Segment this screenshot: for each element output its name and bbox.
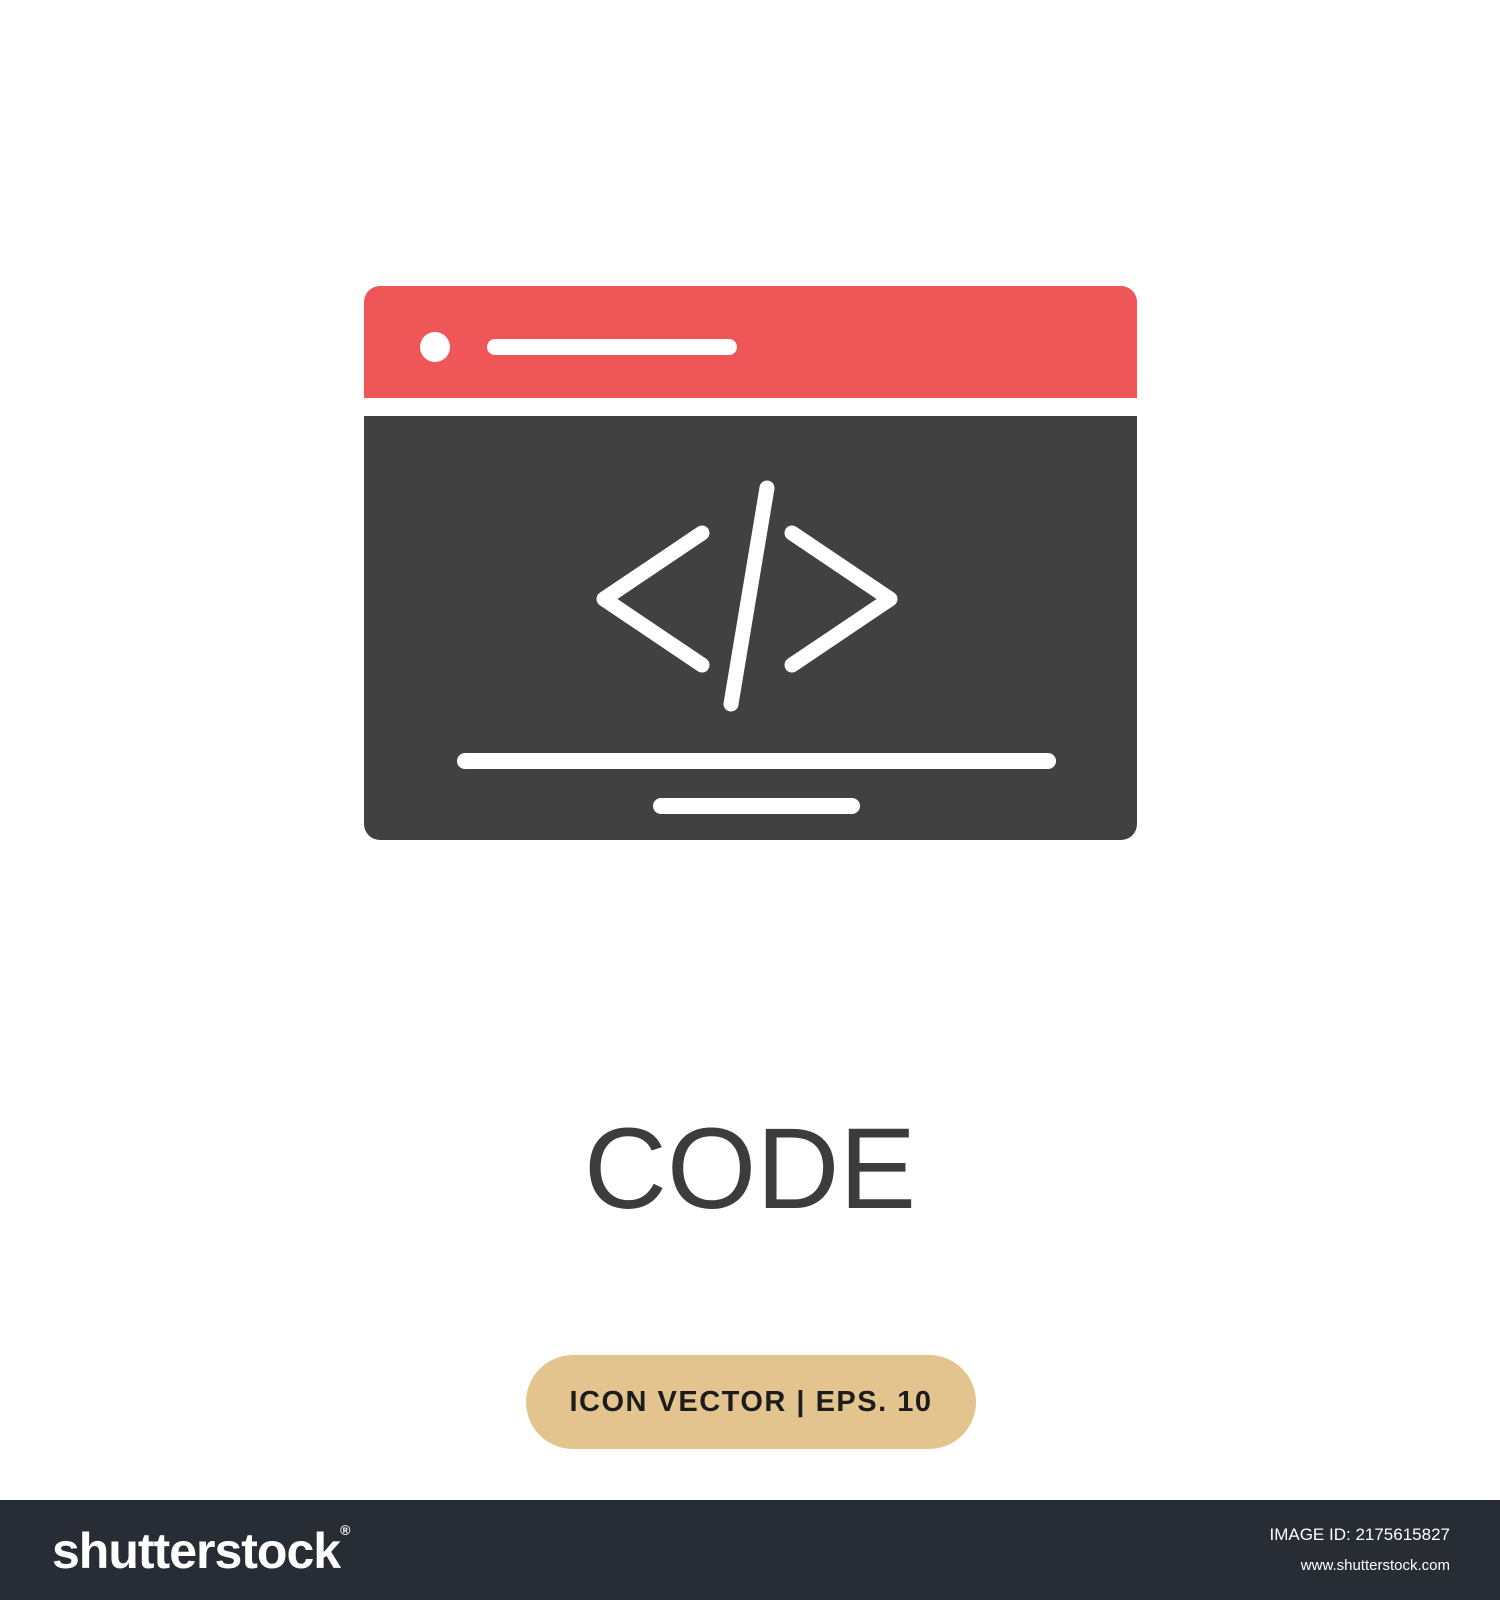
footer image id: www.shutterstock.com <box>1301 1557 1450 1574</box>
browser body <box>364 416 1137 840</box>
footer image id <box>1269 1525 1450 1574</box>
footer bar <box>0 1500 1500 1600</box>
footer image id: IMAGE ID: 2175615827 <box>1269 1525 1450 1544</box>
title: CODE: CODE <box>584 1105 916 1233</box>
code symbol <box>604 488 890 704</box>
footer logo: shutterstock® <box>52 1522 349 1579</box>
badge: icon vector eps 10 <box>526 1355 976 1449</box>
browser header bar <box>364 286 1137 398</box>
badge: icon vector eps 10: ICON VECTOR | EPS. 10 <box>569 1386 932 1418</box>
